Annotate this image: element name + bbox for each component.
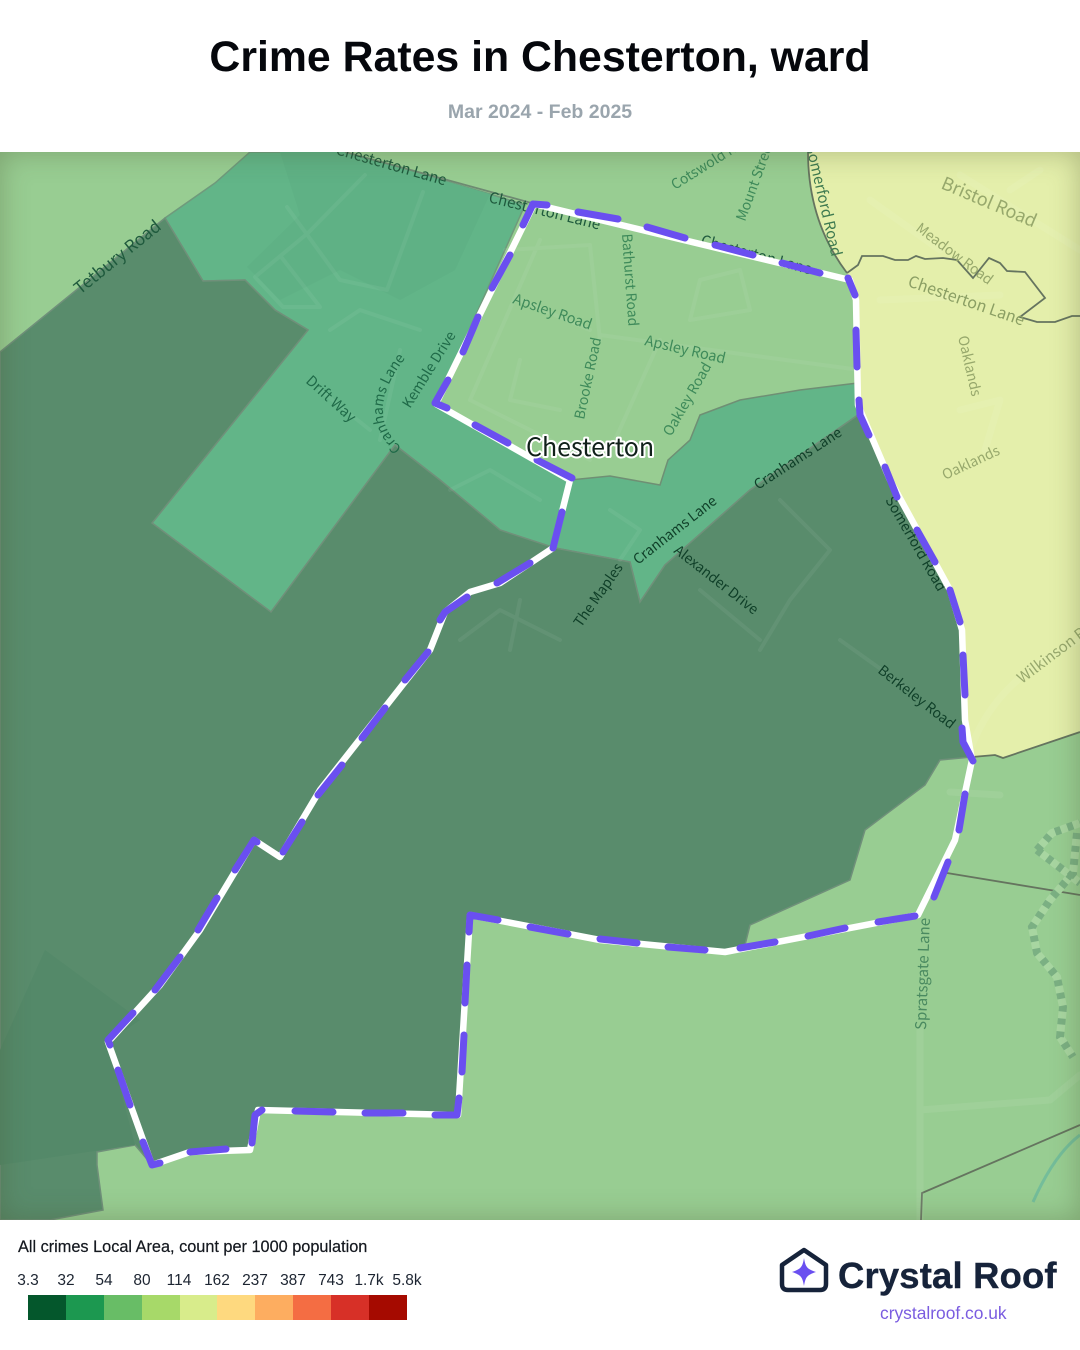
street labels: Oaklands [939, 440, 1003, 485]
subtitle: date range: Mar 2024 - Feb 2025 [448, 101, 632, 123]
street labels: Cranhams Lane [373, 355, 404, 453]
legend colour scale [28, 1295, 407, 1320]
street labels: Cranhams Lane [750, 422, 846, 494]
title: Crime Rates in Chesterton, ward [209, 33, 871, 81]
map [0, 152, 1080, 1220]
map area: light green base [0, 152, 1080, 1220]
region: yellow north-east [808, 152, 1080, 758]
street labels: Oakley Road [658, 359, 716, 440]
region: medium green central wedge [555, 383, 858, 602]
street labels: Berkeley Road [874, 660, 960, 733]
region: medium green north-west [152, 152, 570, 612]
region: darker green south-west corner [0, 950, 140, 1165]
legend tick labels: 114 [167, 1272, 191, 1289]
street labels: Apsley Road [643, 329, 728, 368]
legend tick labels: 162 [204, 1272, 230, 1289]
street labels: Oaklands [953, 334, 987, 399]
main roads [870, 170, 1080, 1220]
street labels: Brooke Road [569, 335, 606, 421]
street labels: Spratsgate Lane [910, 918, 935, 1030]
local road network [255, 175, 910, 690]
street labels: Meadow Road [912, 218, 997, 289]
legend tick labels: 743 [318, 1272, 344, 1289]
logo: website url: crystalroof.co.uk [880, 1303, 1007, 1323]
logo: wordmark: Crystal Roof [838, 1255, 1057, 1296]
legend tick labels [17, 1272, 422, 1289]
map edge shading [0, 152, 1080, 1220]
region: dark green south-west and central [0, 218, 972, 1220]
street labels: Drift Way [302, 370, 362, 427]
street labels: Somerford Road [881, 492, 951, 595]
stream [1033, 1135, 1080, 1202]
street labels [67, 152, 1080, 1042]
place label: Chesterton: Chesterton [526, 428, 654, 464]
street labels: Kemble Drive [397, 327, 461, 412]
legend tick labels: 387 [280, 1272, 306, 1289]
legend tick labels: 237 [242, 1272, 268, 1289]
street labels: Tetbury Road [67, 213, 165, 299]
street labels: Cranhams Lane [629, 491, 721, 569]
street labels: Chesterton Lane [905, 268, 1029, 330]
legend tick labels: 3.3 [17, 1272, 39, 1289]
region boundaries: thin lines [345, 152, 1080, 1220]
legend title: All crimes Local Area, count per 1000 population [18, 1238, 367, 1256]
railway track [1032, 823, 1080, 1057]
ward boundary: dashed purple and white outline [108, 204, 973, 1165]
legend tick labels: 54 [95, 1272, 113, 1289]
region: medium green darker block [247, 152, 490, 300]
legend tick labels: 80 [133, 1272, 151, 1289]
legend tick labels: 5.8k [392, 1272, 422, 1289]
street labels: Chesterton Lane [487, 186, 603, 235]
street labels: The Maples [569, 558, 628, 631]
logo: house icon [780, 1248, 828, 1292]
street labels: Bathurst Road [617, 233, 643, 327]
street labels: Alexander Drive [670, 540, 763, 619]
street labels: Apsley Road [510, 288, 595, 335]
street labels: Chesterton Lane [699, 230, 815, 279]
legend tick labels: 32 [57, 1272, 75, 1289]
street labels: Bristol Road [938, 170, 1041, 233]
legend tick labels: 1.7k [354, 1272, 384, 1289]
